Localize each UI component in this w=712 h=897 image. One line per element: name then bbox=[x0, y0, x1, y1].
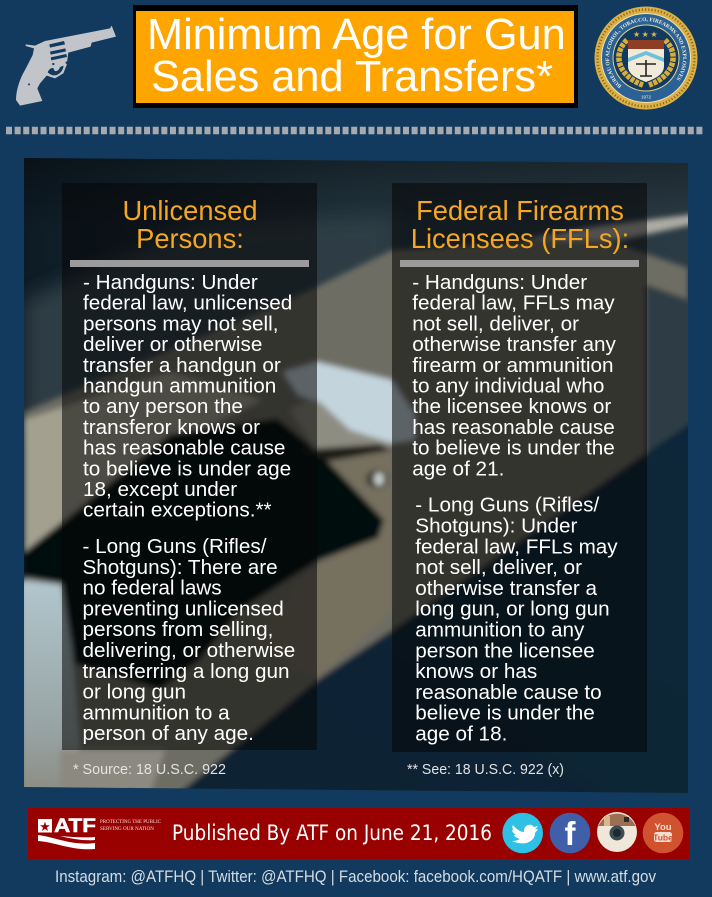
divider: left heading rule bbox=[70, 260, 309, 267]
text: long guns unlicensed: delivering, or otherwise bbox=[82, 639, 295, 662]
text: long guns licensees: - Long Guns (Rifles/ bbox=[415, 494, 600, 517]
shadow line bbox=[296, 444, 392, 461]
text: long guns licensees: age of 18. bbox=[415, 722, 507, 746]
text: long guns licensees: reasonable cause to bbox=[415, 681, 602, 704]
right dark surface bbox=[647, 288, 688, 458]
heading: unlicensed persons: Persons: bbox=[136, 223, 244, 254]
heading: federal firearms licensees bbox=[411, 195, 629, 254]
dotted divider bbox=[6, 127, 703, 134]
icon: twitter bbox=[502, 813, 543, 853]
heading: federal firearms licensees: Federal Firearms bbox=[416, 195, 624, 226]
centre metal bbox=[322, 460, 378, 554]
text: handguns licensees: to any individual who bbox=[412, 374, 604, 398]
text: handguns licensees: the licensee knows or bbox=[412, 395, 611, 418]
lower right navy bbox=[170, 420, 695, 800]
photo background bbox=[20, 158, 695, 800]
text: handguns licensees: otherwise transfer any bbox=[412, 333, 616, 356]
text: long guns licensees: not sell, deliver, or bbox=[415, 556, 582, 579]
icon: ATF seal bbox=[594, 6, 698, 110]
footnote: source: * Source: 18 U.S.C. 922 bbox=[73, 761, 226, 778]
panel: unlicensed persons bbox=[62, 183, 317, 750]
text: long guns unlicensed: - Long Guns (Rifles/ bbox=[82, 535, 267, 558]
text: handguns unlicensed bbox=[83, 271, 292, 522]
panel: federal firearms licensees bbox=[392, 183, 647, 752]
title box bbox=[133, 5, 578, 108]
text: handguns unlicensed: certain exceptions.** bbox=[83, 499, 272, 522]
text: handguns unlicensed: federal law, unlicensed bbox=[83, 292, 292, 315]
text: long guns licensees: federal law, FFLs may bbox=[415, 535, 618, 558]
text: handguns licensees: federal law, FFLs may bbox=[412, 292, 615, 315]
icon: ATF seal: ★★★ bbox=[633, 30, 659, 39]
text: handguns unlicensed: to believe is under age bbox=[83, 457, 291, 480]
text: long guns unlicensed: persons from selling, bbox=[82, 618, 273, 641]
text: handguns unlicensed: handgun ammunition bbox=[83, 374, 276, 398]
text: long guns licensees: ammunition to any bbox=[415, 618, 585, 642]
lower left light blue bbox=[20, 580, 80, 795]
text: long guns unlicensed: person of any age. bbox=[82, 722, 254, 745]
text: long guns unlicensed: or long gun bbox=[82, 681, 186, 704]
text: long guns licensees: otherwise transfer a bbox=[415, 577, 597, 600]
icon: ATF seal: BUREAU OF ALCOHOL, TOBACCO, FIREARMS AND EXPLOSIVES bbox=[605, 18, 687, 88]
text: long guns unlicensed: Shotguns): There are bbox=[82, 556, 278, 579]
divider: right heading rule bbox=[400, 260, 639, 267]
icon: youtube bbox=[643, 813, 683, 853]
text: long guns licensees bbox=[415, 494, 618, 746]
footer bar bbox=[28, 808, 689, 859]
text: handguns unlicensed: persons may not sell, bbox=[83, 312, 278, 335]
heading: unlicensed persons bbox=[122, 195, 258, 254]
icon: facebook bbox=[550, 813, 590, 853]
taupe under highlight bbox=[290, 395, 392, 452]
text: handguns unlicensed: has reasonable cause bbox=[83, 437, 285, 460]
text: handguns unlicensed: transfer a handgun or bbox=[83, 354, 281, 377]
text: handguns licensees: firearm or ammunition bbox=[412, 354, 614, 377]
icon: ATF seal: 1972 bbox=[641, 94, 652, 100]
logo: ATF bbox=[38, 816, 162, 849]
icon: youtube: Tube bbox=[653, 832, 673, 842]
bolt bbox=[366, 470, 388, 488]
dark centre wedge bbox=[24, 418, 384, 690]
icon: revolver bbox=[16, 26, 116, 106]
main slide bbox=[24, 238, 688, 795]
text: handguns unlicensed: deliver or otherwise bbox=[83, 333, 262, 356]
text: handguns unlicensed: to any person the bbox=[83, 395, 243, 418]
text: long guns unlicensed: preventing unlicensed bbox=[82, 597, 284, 620]
text: long guns licensees: long gun, or long gun bbox=[415, 598, 610, 621]
light strip bbox=[520, 214, 695, 240]
logo: ATF: ATF bbox=[54, 816, 96, 837]
text: long guns licensees: believe is under the bbox=[415, 702, 595, 725]
text: long guns licensees: person the licensee bbox=[415, 639, 595, 662]
text: published by: Published By ATF on June 21, 2016 bbox=[172, 821, 492, 846]
title: Sales and Transfers* bbox=[151, 53, 553, 101]
heading: unlicensed persons: Unlicensed bbox=[122, 195, 258, 226]
text: handguns licensees bbox=[412, 271, 616, 480]
footer contact line: Instagram: @ATFHQ | Twitter: @ATFHQ | Facebook: facebook.com/HQATF | www.atf.gov bbox=[55, 868, 657, 886]
text: handguns licensees: to believe is under the bbox=[412, 437, 615, 460]
icon: youtube: You bbox=[654, 822, 672, 833]
blue white highlight bbox=[283, 362, 415, 443]
text: long guns licensees: Shotguns): Under bbox=[415, 514, 578, 538]
text: long guns licensees: knows or has bbox=[415, 660, 537, 683]
text: long guns unlicensed bbox=[82, 535, 295, 745]
title bbox=[147, 11, 566, 101]
text: handguns unlicensed: transferor knows or bbox=[83, 416, 260, 439]
logo: ATF: ★ bbox=[39, 819, 51, 834]
text: handguns unlicensed: - Handguns: Under bbox=[83, 271, 258, 294]
icon: instagram bbox=[597, 812, 637, 852]
text: handguns licensees: age of 21. bbox=[412, 457, 504, 480]
logo: ATF: PROTECTING THE PUBLIC bbox=[100, 819, 162, 825]
text: long guns unlicensed: transferring a long gun bbox=[82, 660, 290, 683]
icon: facebook: f bbox=[564, 815, 576, 852]
bottom taupe strip bbox=[60, 750, 166, 788]
text: handguns licensees: not sell, deliver, or bbox=[412, 312, 579, 335]
text: handguns unlicensed: 18, except under bbox=[83, 478, 237, 501]
heading: federal firearms licensees: Licensees (FFLs): bbox=[411, 223, 629, 254]
text: long guns unlicensed: no federal laws bbox=[82, 577, 222, 600]
left light band bbox=[24, 372, 262, 555]
logo: ATF: SERVING OUR NATION bbox=[100, 826, 154, 832]
text: long guns unlicensed: ammunition to a bbox=[82, 701, 230, 724]
text: handguns licensees: - Handguns: Under bbox=[412, 271, 587, 294]
title: Minimum Age for Gun bbox=[147, 11, 566, 59]
footnote: see: ** See: 18 U.S.C. 922 (x) bbox=[407, 761, 564, 778]
text: handguns licensees: has reasonable cause bbox=[412, 416, 615, 439]
